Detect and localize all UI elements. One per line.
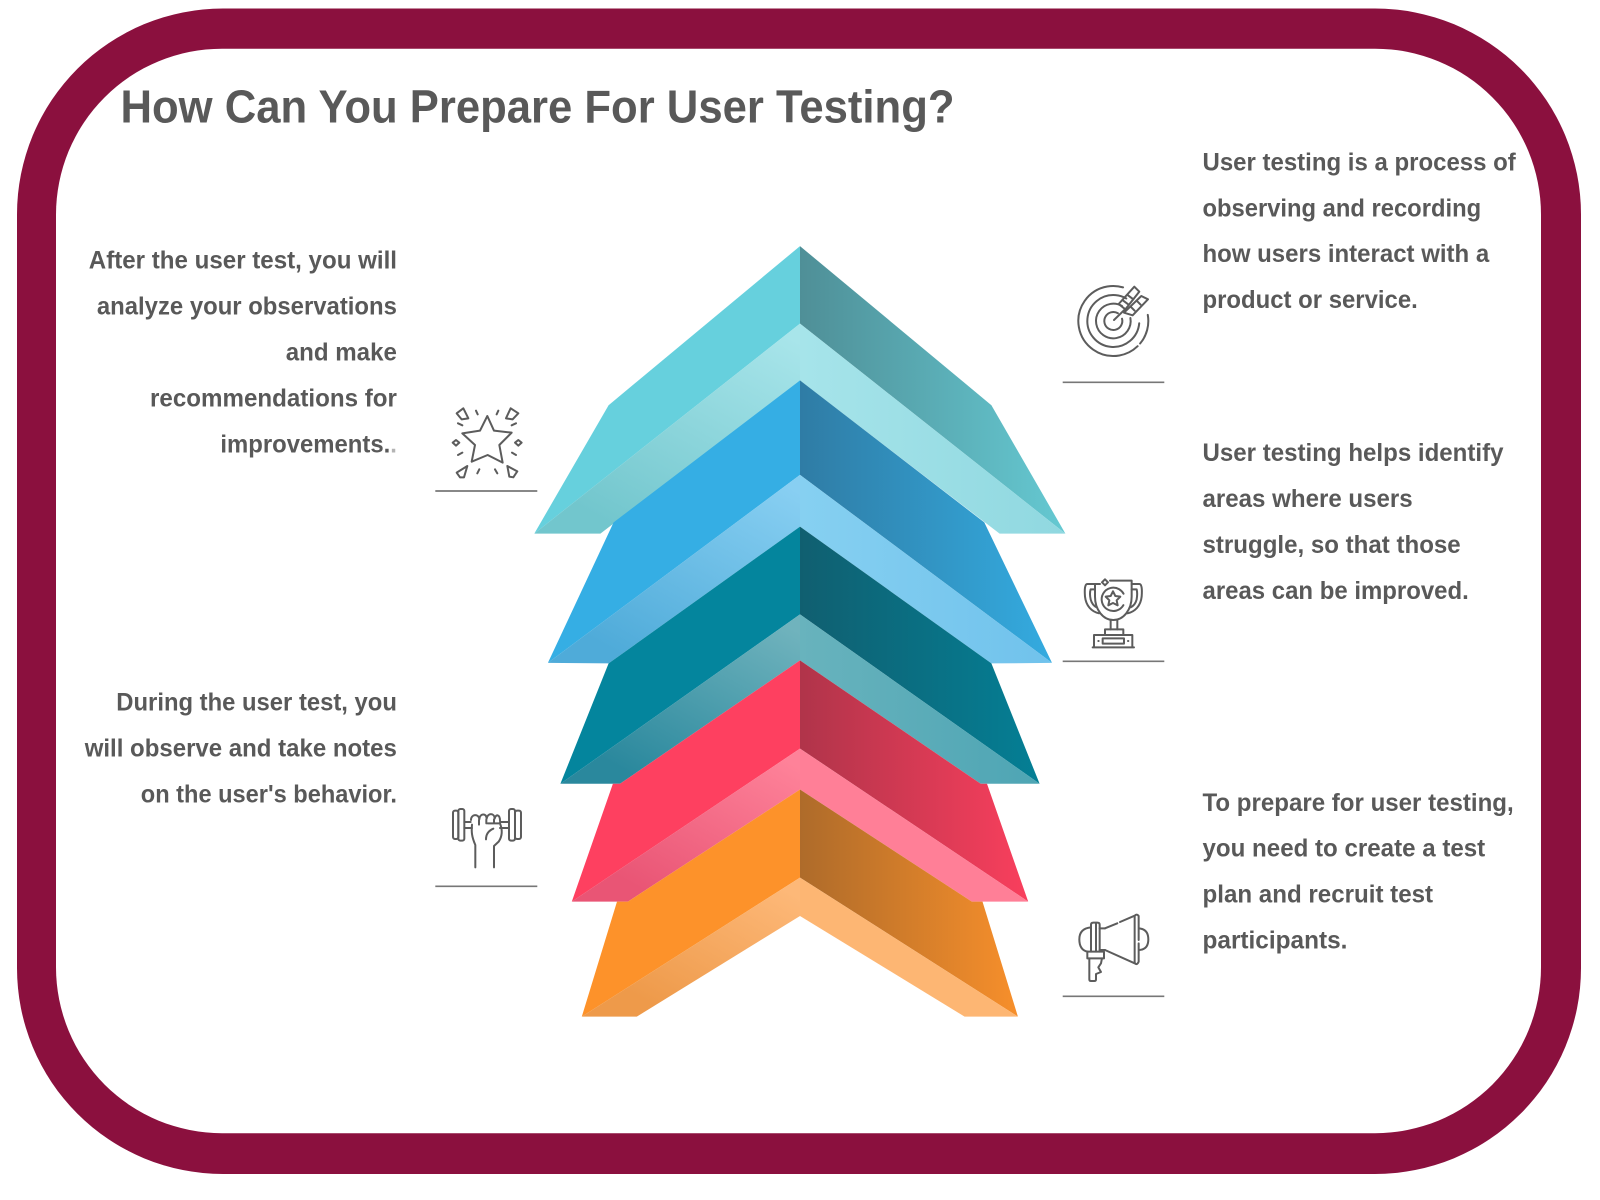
text block: after the test: improvements.. [220,430,397,458]
divider: trophy [1063,660,1164,662]
text block: identify struggle areas [1202,439,1504,605]
text block: during the test: on the user's behavior. [141,780,397,808]
text block: during the test: will observe and take notes [84,734,397,762]
chevron layer 2: blue [548,380,1052,663]
icon: trophy [1085,579,1142,647]
divider: megaphone [1063,995,1164,997]
text block: during the test [84,688,397,808]
text block: after the test: analyze your observations [97,293,397,321]
text block: prepare for testing: you need to create a test [1202,835,1486,863]
divider: star [435,490,537,492]
text block: after the test: and make [286,338,397,366]
text block: what user testing is: User testing is a process of [1202,148,1516,176]
chevron layer 1: light teal [534,246,1065,534]
icon: star with sparkles [453,408,522,477]
text block: what user testing is: observing and recording [1202,194,1481,222]
text block: identify struggle areas: struggle, so that those [1202,531,1461,559]
text block: prepare for testing [1202,789,1514,954]
divider: dumbbell [435,885,537,887]
chevron layer 5: orange [582,790,1018,1017]
text block: identify struggle areas: areas can be improved. [1202,577,1469,605]
title: How Can You Prepare For User Testing? [120,81,954,133]
divider: target [1063,381,1164,383]
text block: identify struggle areas: User testing helps identify [1202,439,1504,467]
text block: what user testing is: how users interact with a [1202,240,1490,268]
text block: prepare for testing: plan and recruit test [1202,881,1434,909]
text block: what user testing is [1202,148,1516,314]
text block: after the test [89,247,397,458]
chart: stacked chevron pyramid [534,246,1065,1017]
text block: identify struggle areas: areas where users [1202,485,1413,513]
icon: target with arrow [1073,280,1154,362]
text block: after the test: After the user test, you will [89,247,397,275]
chevron layer 4: red [572,660,1028,902]
text block: prepare for testing: To prepare for user testing, [1202,789,1514,817]
text block: after the test: recommendations for [150,384,397,412]
text block: what user testing is: product or service. [1202,286,1418,314]
text block: during the test: During the user test, you [116,688,397,716]
text block: prepare for testing: participants. [1202,926,1347,954]
icon: fist with dumbbell [453,809,521,867]
chevron layer 3: dark teal [560,527,1040,784]
icon: megaphone [1079,915,1148,981]
